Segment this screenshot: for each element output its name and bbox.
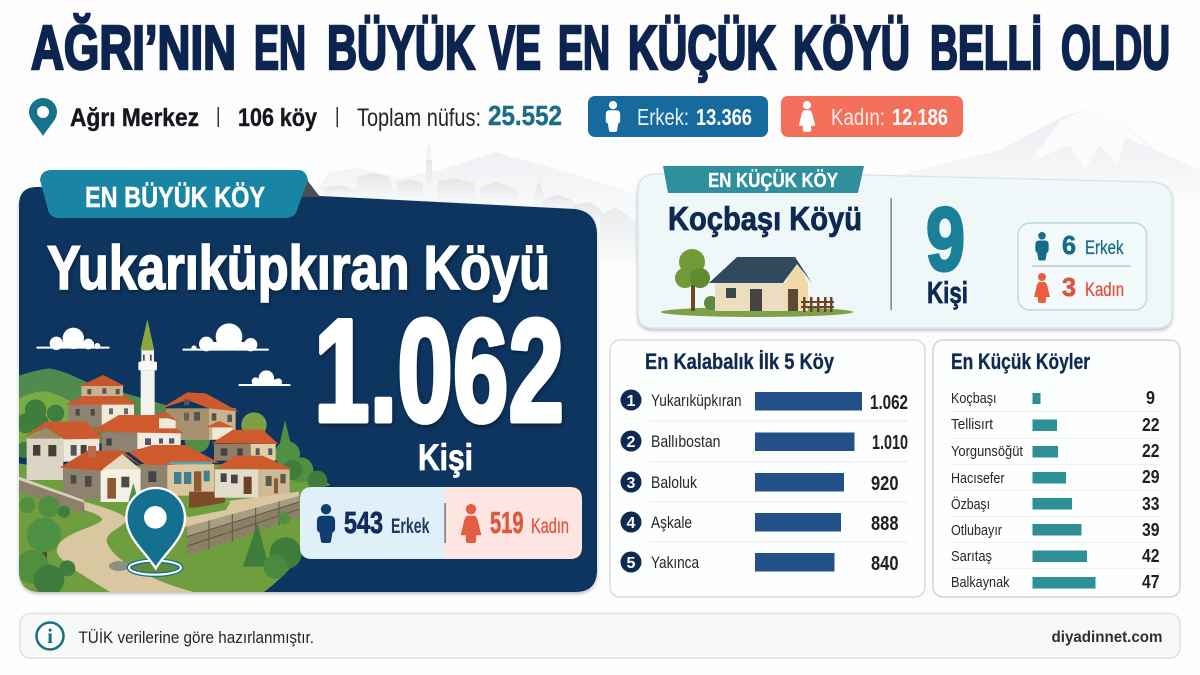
house: right top bbox=[161, 392, 239, 440]
row: Tellisırt bbox=[951, 415, 1160, 435]
row 1: 1 bbox=[627, 393, 636, 410]
ground bbox=[19, 463, 331, 597]
row 3 bbox=[620, 472, 898, 495]
label: erkek: Erkek bbox=[391, 515, 430, 538]
panel: en kalabalık ilk 5 köy bbox=[610, 340, 925, 597]
label: kişi: Kişi bbox=[927, 275, 968, 310]
icon: man bbox=[317, 504, 335, 543]
row: Balkaynak: Balkaynak bbox=[951, 574, 1010, 591]
background: mountain bbox=[906, 108, 1200, 200]
row: Hacısefer bbox=[951, 467, 1160, 487]
panel: en büyük köy bbox=[16, 170, 597, 597]
icon: info: i bbox=[47, 624, 53, 648]
title: EN bbox=[558, 14, 610, 83]
label: kadın: Kadın bbox=[531, 515, 569, 538]
row 4: 4 bbox=[627, 515, 636, 532]
row 4: 888 bbox=[871, 513, 898, 535]
row 1 bbox=[620, 390, 908, 414]
house: front center bbox=[129, 445, 225, 508]
house: top bbox=[65, 375, 137, 427]
number: kadın: 519 bbox=[490, 505, 524, 540]
icon: info bbox=[36, 622, 64, 650]
row 5: 5 bbox=[627, 555, 636, 572]
illustration: house bbox=[661, 249, 853, 317]
village name: Yukarıküpkıran Köyü bbox=[47, 234, 550, 303]
house: center big bbox=[92, 412, 184, 452]
row 2: 2 bbox=[627, 434, 636, 451]
row 4: Aşkale bbox=[651, 513, 692, 532]
foreground trees bbox=[16, 483, 302, 595]
gender split box bbox=[300, 487, 582, 559]
row 1: 1.062 bbox=[870, 392, 908, 414]
panel background bbox=[19, 187, 597, 592]
row 3: 3 bbox=[627, 475, 636, 492]
row: Özbaşı: Özbaşı bbox=[951, 495, 990, 513]
row 5 bbox=[620, 552, 898, 575]
row: Özbaşı bbox=[951, 494, 1160, 514]
row: Balkaynak bbox=[951, 572, 1160, 592]
row: Otlubayır bbox=[951, 520, 1160, 540]
row: Hacısefer: Hacısefer bbox=[951, 470, 1004, 487]
number: 9: 9 bbox=[926, 190, 965, 290]
hills bbox=[19, 368, 166, 443]
background: village skyline bbox=[313, 142, 640, 262]
icon: location pin bbox=[29, 98, 57, 136]
row 4 bbox=[620, 512, 898, 535]
title: VE bbox=[489, 14, 541, 83]
row 5: 840 bbox=[871, 553, 898, 575]
label: kişi: Kişi bbox=[418, 437, 473, 478]
badge: erkek total bbox=[588, 96, 768, 137]
row: Koçbaşı: Koçbaşı bbox=[951, 390, 996, 407]
row: Sarıtaş bbox=[951, 546, 1160, 566]
row: Yorgunsöğüt: 22 bbox=[1142, 441, 1160, 461]
house: left bbox=[22, 422, 104, 480]
tab: en küçük köy bbox=[663, 166, 864, 193]
title bbox=[31, 14, 1170, 83]
village name: Koçbaşı Köyü bbox=[668, 200, 862, 237]
gender box: Kadın bbox=[1085, 280, 1124, 301]
badge: erkek total: Erkek: bbox=[637, 104, 689, 130]
right stone wall bbox=[187, 496, 300, 556]
row: Yorgunsöğüt bbox=[951, 441, 1160, 461]
title: AĞRI’NIN bbox=[31, 14, 236, 83]
heading: En Kalabalık İlk 5 Köy bbox=[645, 349, 835, 374]
badge: erkek total: 13.366 bbox=[696, 104, 752, 130]
tab: en büyük köy bbox=[40, 170, 308, 218]
tab: en küçük köy: EN KÜÇÜK KÖY bbox=[708, 169, 839, 192]
heading: En Küçük Köyler bbox=[951, 349, 1090, 374]
info row: location and totals bbox=[29, 98, 562, 136]
gender box: 6 bbox=[1062, 230, 1076, 260]
gender box bbox=[1018, 223, 1146, 310]
clouds bbox=[36, 323, 291, 386]
row: Otlubayır: Otlubayır bbox=[951, 522, 1002, 539]
icon: woman bbox=[461, 504, 481, 543]
badge: kadın total: 12.186 bbox=[892, 104, 948, 130]
badge: kadın total bbox=[781, 96, 963, 137]
row 3: Baloluk bbox=[651, 473, 697, 492]
house: right middle bbox=[212, 429, 278, 461]
row 2: Ballıbostan bbox=[651, 432, 720, 451]
title: KÖYÜ bbox=[793, 14, 910, 83]
fold of the tab bbox=[298, 176, 320, 197]
row: Koçbaşı bbox=[951, 388, 1155, 408]
row: Yorgunsöğüt: Yorgunsöğüt bbox=[951, 443, 1024, 460]
row: Sarıtaş: Sarıtaş bbox=[951, 548, 992, 565]
tab: en büyük köy: EN BÜYÜK KÖY bbox=[85, 181, 265, 214]
row: Otlubayır: 39 bbox=[1142, 520, 1160, 540]
number: erkek: 543 bbox=[344, 505, 383, 540]
row 1: Yukarıküpkıran bbox=[651, 391, 742, 410]
house: front right bbox=[215, 456, 293, 498]
text: toplam nüfus: Toplam nüfus: bbox=[357, 104, 481, 132]
website: diyadinnet.com bbox=[1052, 629, 1162, 646]
row: Tellisırt: Tellisırt bbox=[951, 416, 994, 433]
panel: en küçük köyler bbox=[933, 340, 1180, 597]
footer bar bbox=[20, 614, 1180, 658]
source note: TÜİK verilerine göre hazırlanmıştır. bbox=[78, 628, 314, 647]
text: Ağrı Merkez: Ağrı Merkez bbox=[70, 104, 199, 132]
row: Sarıtaş: 42 bbox=[1142, 546, 1160, 566]
row: Koçbaşı: 9 bbox=[1146, 388, 1155, 408]
panel background bbox=[638, 174, 1172, 328]
row: Balkaynak: 47 bbox=[1142, 572, 1160, 592]
row: Özbaşı: 33 bbox=[1142, 494, 1160, 514]
trees behind bbox=[16, 399, 327, 491]
lawn bbox=[108, 526, 194, 592]
row: Hacısefer: 29 bbox=[1142, 467, 1160, 487]
title: BÜYÜK bbox=[327, 14, 475, 83]
row 2 bbox=[620, 430, 908, 454]
title: EN bbox=[254, 14, 306, 83]
title: KÜÇÜK bbox=[628, 14, 776, 83]
icon: map pin bbox=[109, 488, 185, 575]
row 3: 920 bbox=[871, 473, 898, 495]
house: front left bbox=[60, 446, 145, 502]
illustration: village bbox=[16, 319, 331, 597]
minaret bbox=[138, 319, 157, 417]
row 2: 1.010 bbox=[872, 432, 908, 454]
big number: 1.062 bbox=[314, 289, 564, 452]
badge: kadın total: Kadın: bbox=[831, 104, 885, 130]
road bbox=[57, 492, 299, 593]
row 5: Yakınca bbox=[651, 553, 699, 572]
text: 106 köy: 106 köy bbox=[238, 104, 317, 132]
title: BELLİ bbox=[930, 14, 1042, 83]
gender box: 3 bbox=[1062, 272, 1076, 302]
gender box: Erkek bbox=[1085, 238, 1124, 259]
left stone wall bbox=[19, 477, 85, 515]
number: toplam nüfus: 25.552 bbox=[488, 100, 562, 131]
panel: en küçük köy bbox=[638, 166, 1172, 328]
row: Tellisırt: 22 bbox=[1142, 415, 1160, 435]
